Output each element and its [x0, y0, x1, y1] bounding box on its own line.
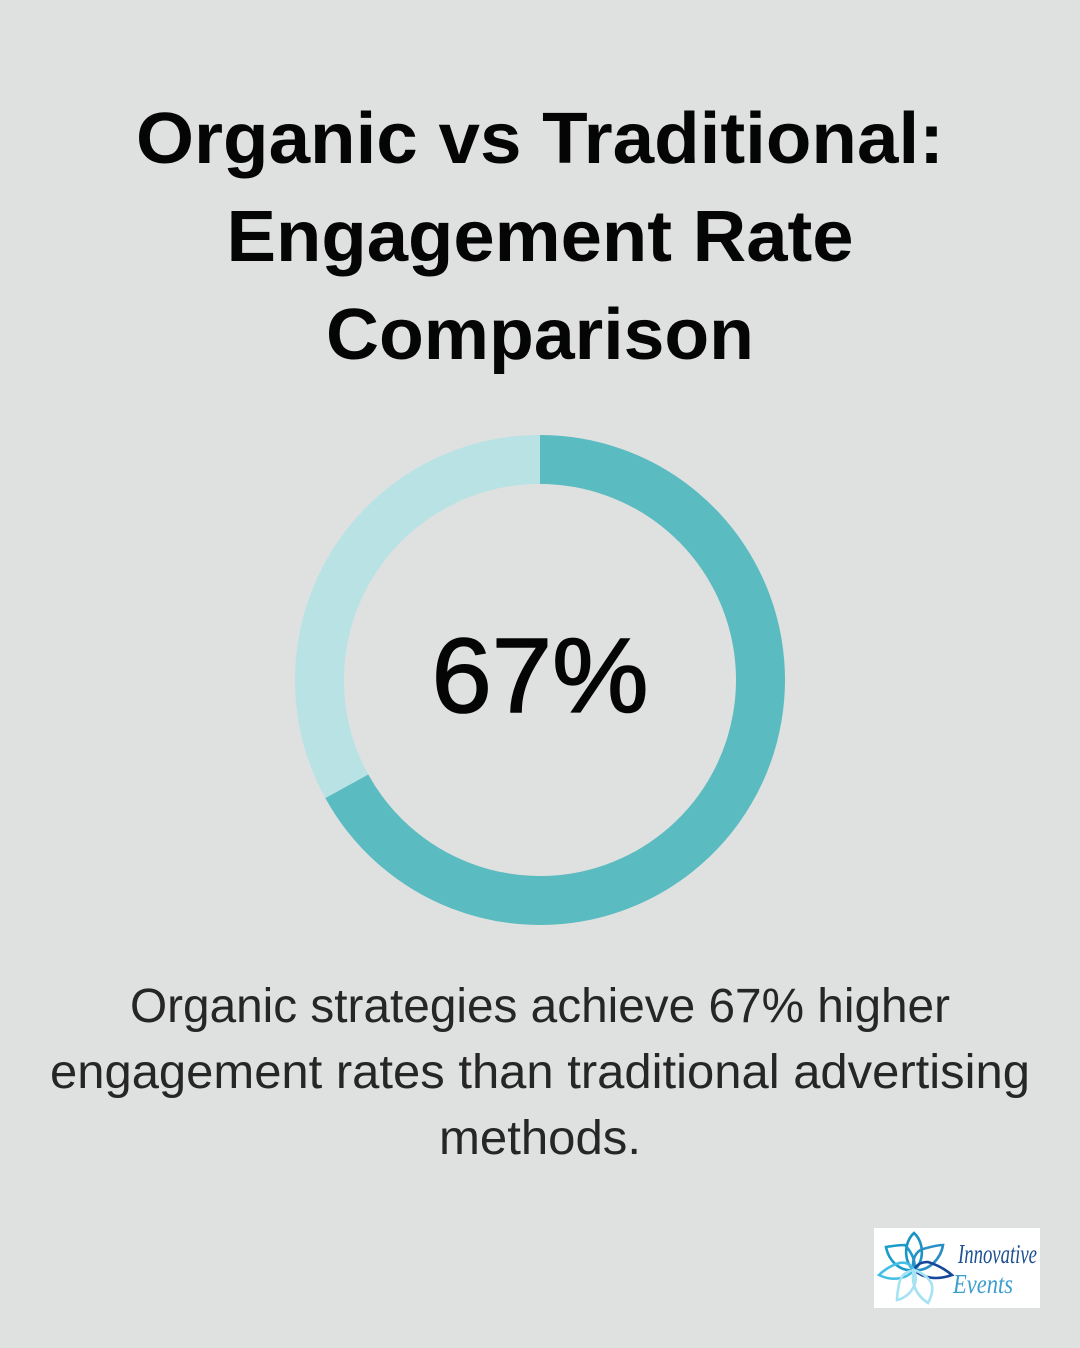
donut chart: 67%	[319, 459, 760, 900]
title: Engagement Rate	[226, 197, 854, 277]
title: Organic vs Traditional:	[136, 99, 944, 179]
title: Comparison	[326, 295, 754, 375]
donut value segment	[347, 460, 760, 900]
donut remainder segment	[319, 459, 540, 786]
logo wordmark: Events	[952, 1269, 1013, 1299]
logo wordmark: Innovative	[957, 1239, 1037, 1269]
icon: lotus flower	[879, 1233, 952, 1303]
description text: Organic strategies achieve 67% higher	[130, 980, 950, 1033]
description text: methods.	[439, 1112, 641, 1165]
logo: Innovative Events	[874, 1228, 1040, 1308]
title	[136, 99, 944, 375]
donut center value: 67%	[432, 617, 648, 735]
description text: engagement rates than traditional advertising	[50, 1046, 1030, 1099]
logo wordmark	[952, 1239, 1037, 1299]
description text	[50, 980, 1030, 1165]
